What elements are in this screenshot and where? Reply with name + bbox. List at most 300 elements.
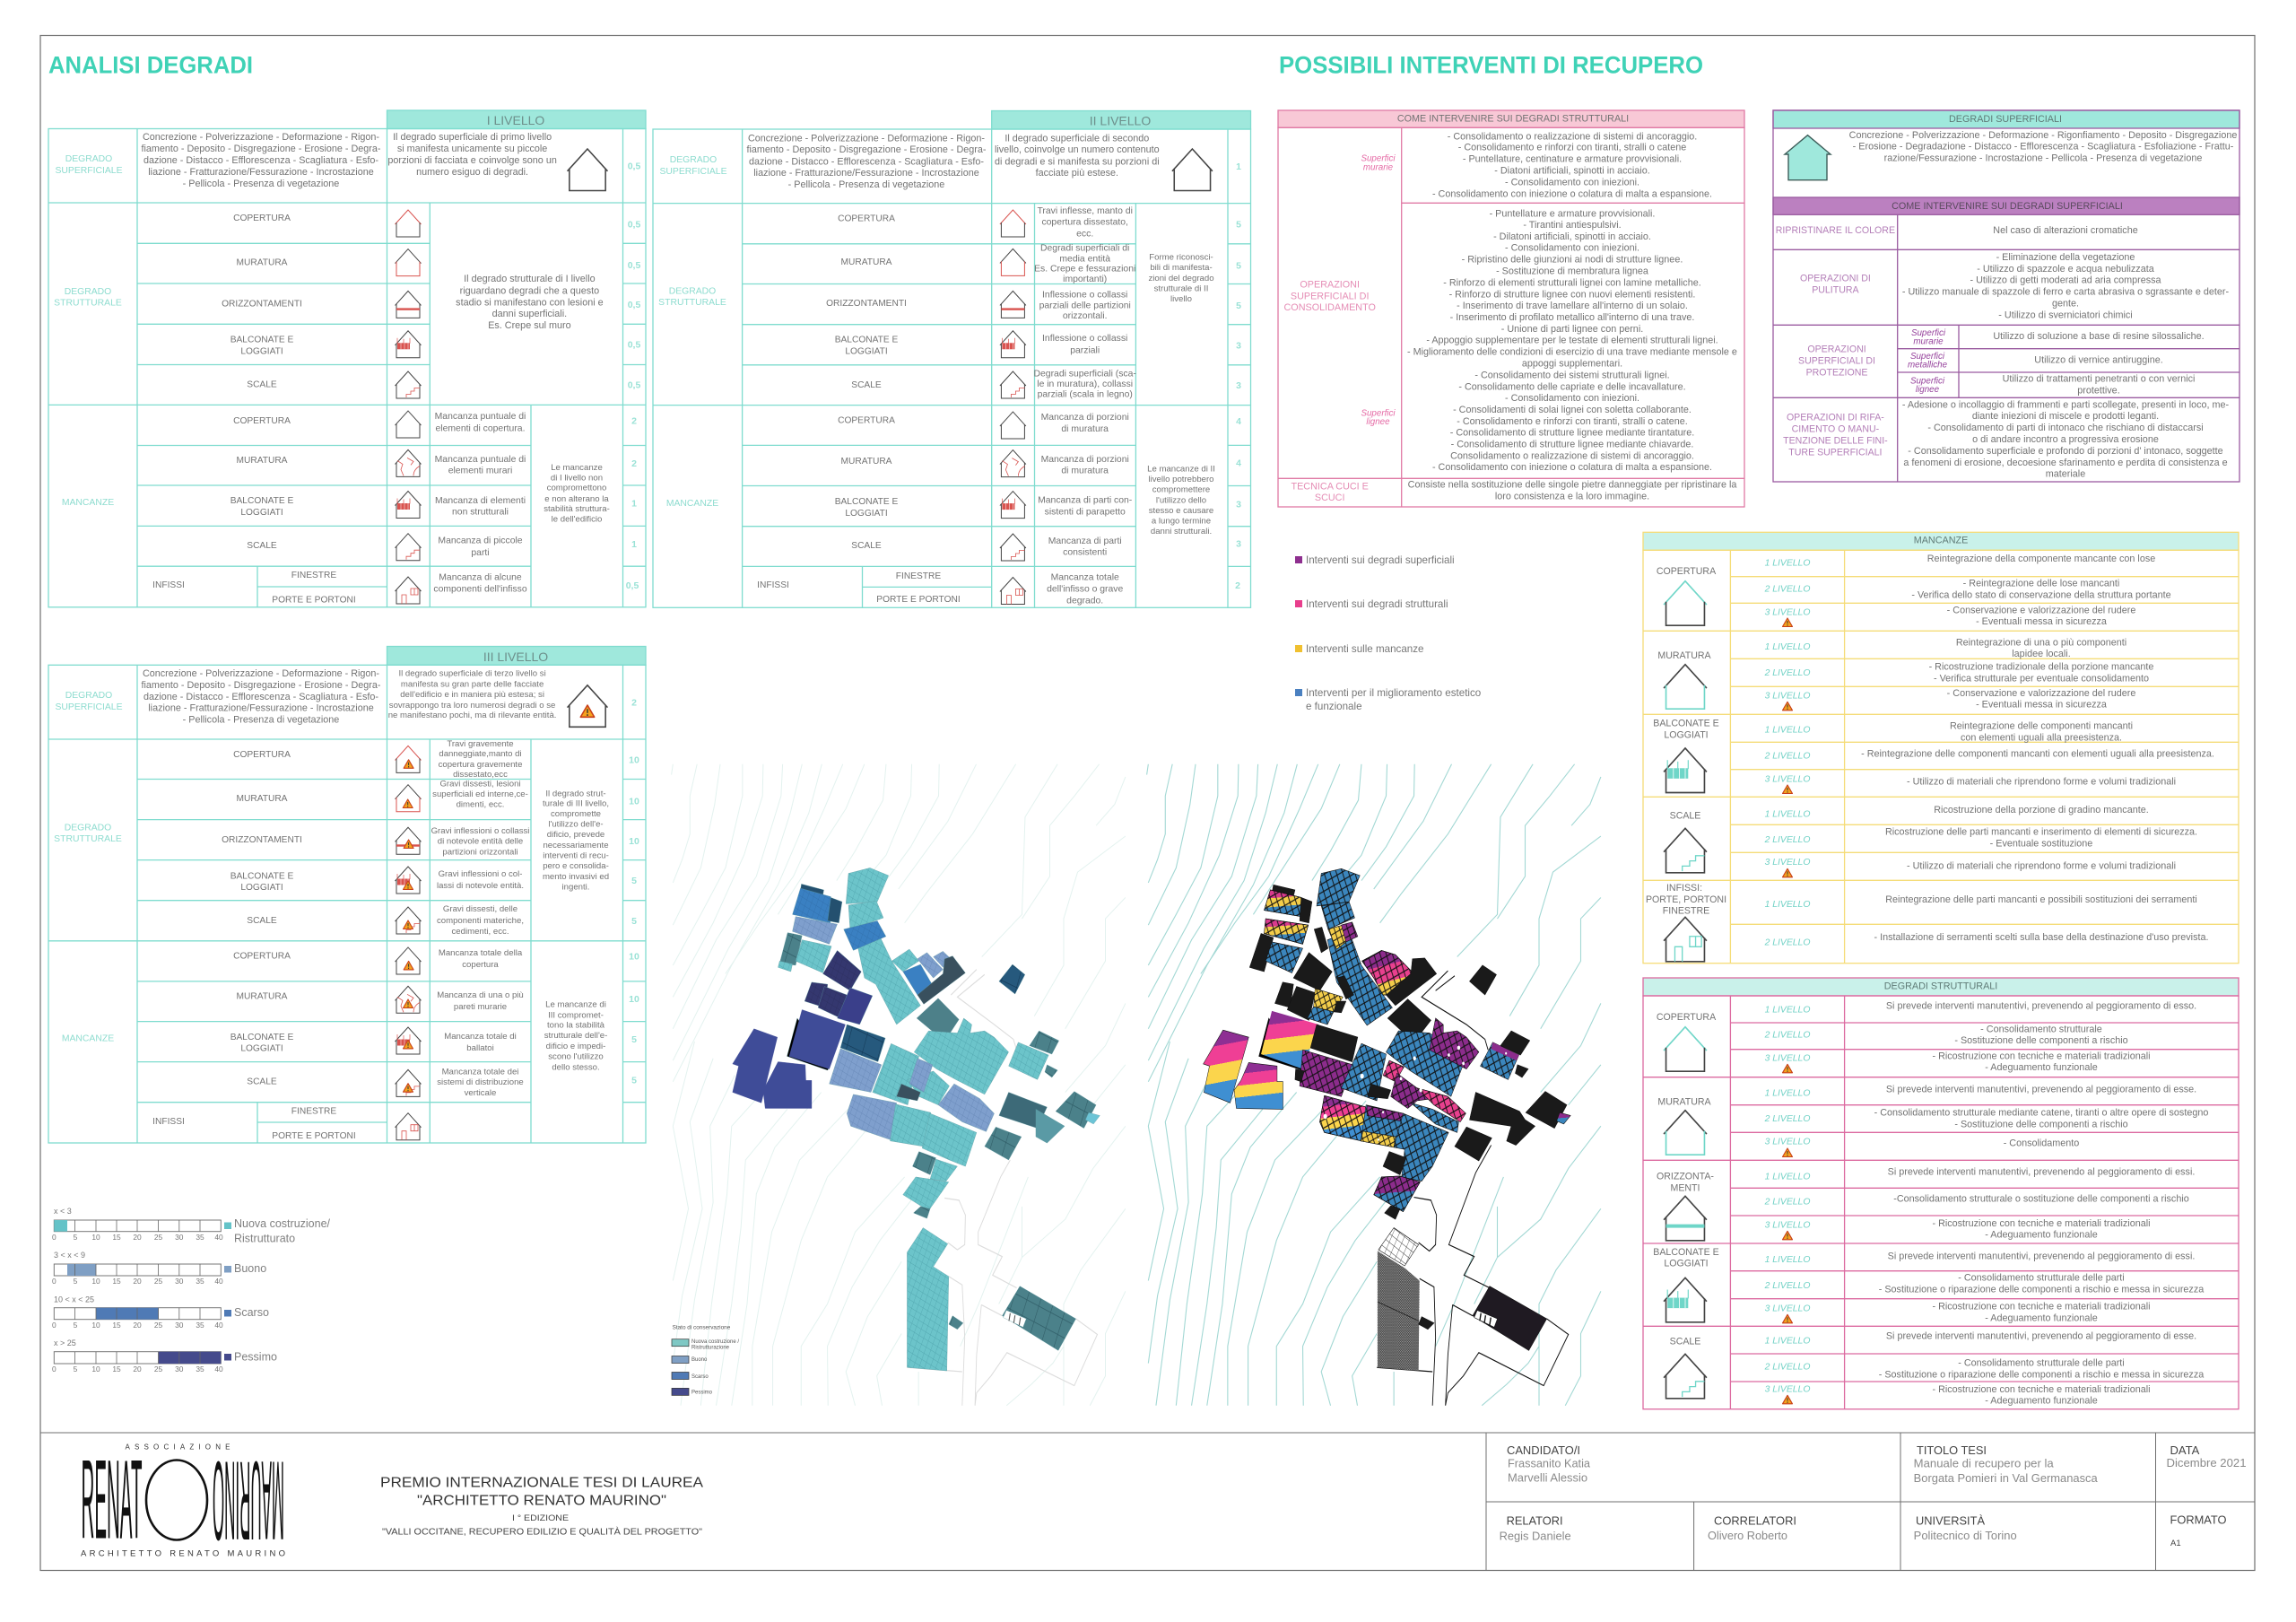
- scores: punteggi: 0,5: [628, 161, 640, 172]
- cartiglio: formato: [2170, 1513, 2226, 1548]
- row labels: OPERAZIONI DI RIFA-: [1787, 413, 1884, 423]
- component names: ORIZZONTA-: [1657, 1172, 1714, 1182]
- text: nota strutturale III livello: turale di III livello,: [543, 798, 609, 808]
- scores: punteggi: 3: [1236, 539, 1241, 550]
- title: analisi degradi: ANALISI DEGRADI: [48, 52, 253, 79]
- axis numbers: 0: [52, 1321, 57, 1330]
- text: superfici lignee: - Consolidamento delle capriate e delle incavallature.: [1458, 381, 1686, 392]
- range labels: 3 < x < 9: [54, 1251, 85, 1260]
- level labels: 3 LIVELLO: [1765, 691, 1810, 701]
- row names: PORTE E PORTONI: [272, 1130, 356, 1140]
- text: interventi mancanze: con elementi uguali alla preesistenza.: [1961, 733, 2122, 744]
- row names: BALCONATE E: [835, 497, 898, 506]
- level labels: 2 LIVELLO: [1764, 834, 1810, 845]
- text: descrizioni operazioni: a fenomeni di erosione, decoesione sfarinamento e perdita di consistenza e: [1903, 458, 2228, 468]
- row labels: SUPERFICIALI DI: [1798, 356, 1875, 367]
- text: descrizione degrado superficiale III livello: ne manifestano pochi, ma di rilevante entità.: [388, 711, 556, 720]
- row labels: OPERAZIONI: [1807, 344, 1866, 355]
- text: superfici lignee: - Unione di parti lignee con perni.: [1501, 324, 1643, 335]
- sublabel: superfici murarie: murarie: [1363, 162, 1394, 172]
- text: descrizione degrado superficiale I livello: si manifesta unicamente su piccole: [397, 144, 547, 154]
- heading: COME INTERVENIRE SUI DEGRADI STRUTTURALI: [1397, 113, 1629, 124]
- component names: LOGGIATI: [1664, 1259, 1709, 1269]
- level labels: 1 LIVELLO: [1765, 1336, 1810, 1346]
- text: interventi mancanze: - Ricostruzione tradizionale della porzione mancante: [1929, 662, 2153, 673]
- text: titolo premio: "VALLI OCCITANE, RECUPERO EDILIZIO E QUALITÀ DEL PROGETTO": [382, 1525, 702, 1538]
- text: superfici murarie: - Consolidamento e rinforzi con tiranti, stralli o catene: [1458, 143, 1686, 153]
- row label: degrado strutturale: STRUTTURALE: [54, 834, 122, 843]
- text: elenco degradi superficiali: liazione - Fratturazione/Fessurazione - Incrostazione: [148, 703, 374, 714]
- level labels: 1 LIVELLO: [1765, 899, 1810, 910]
- row label: degrado superficiale: SUPERFICIALE: [55, 165, 123, 176]
- text: nota mancanze I livello: e non alterano la: [544, 493, 609, 503]
- cartiglio: universita: UNIVERSITÀ: [1916, 1514, 1985, 1527]
- text: descrizione degrado superficiale III livello: dell'edificio e in maniera più estesa; si: [400, 689, 544, 700]
- text: interventi strutturali: Si prevede interventi manutentivi, prevenendo al peggioramento di esse.: [1886, 1330, 2196, 1341]
- row names: MURATURA: [237, 257, 288, 267]
- level labels: 2 LIVELLO: [1764, 1114, 1810, 1123]
- range labels: x > 25: [54, 1339, 76, 1347]
- text: descrizioni II livello: sistenti di parapetto: [1045, 507, 1126, 517]
- text: nota mancanze I livello: di I livello non: [551, 473, 603, 483]
- row names: COPERTURA: [233, 749, 291, 759]
- text: interventi strutturali: - Ricostruzione con tecniche e materiali tradizionali: [1932, 1218, 2151, 1229]
- heading: mancanze: MANCANZE: [1914, 536, 1968, 546]
- sublabels: superfici: metalliche: [1908, 360, 1948, 370]
- text: nota mancanze I livello: Le mancanze: [551, 463, 603, 472]
- text: superfici lignee: - Miglioramento delle condizioni di esercizio di una trave mediante mensole e: [1407, 347, 1737, 358]
- level labels: 1 LIVELLO: [1765, 1088, 1810, 1098]
- scores: punteggi: 5: [631, 916, 637, 927]
- text: superfici lignee: Consolidamento o realizzazione di sistemi di ancoraggio.: [1450, 450, 1694, 461]
- text: nota mancanze III livello: dello stesso.: [552, 1062, 600, 1072]
- text: descrizioni operazioni: - Eliminazione della vegetazione: [1996, 252, 2135, 263]
- row label: degrado strutturale: DEGRADO: [669, 286, 716, 296]
- text: descrizioni operazioni: gente.: [2052, 299, 2079, 310]
- text: descrizioni mancanze I livello: parti: [471, 547, 490, 558]
- text: degrado strutturale I livello: Il degrado strutturale di I livello: [464, 274, 596, 284]
- legend: stato di conservazione: [672, 1324, 739, 1396]
- text: nota strutturale III livello: Il degrado strut-: [545, 789, 606, 798]
- row label: mancanze: MANCANZE: [62, 1033, 114, 1044]
- level labels: 3 LIVELLO: [1765, 774, 1810, 784]
- text: interventi strutturali: Si prevede interventi manutentivi, prevenendo al peggioramento di essi.: [1888, 1251, 2195, 1261]
- text: superfici lignee: - Rinforzo di strutture lignee con nuovi elementi resistenti.: [1449, 289, 1695, 300]
- heading: II livello: II LIVELLO: [1090, 113, 1151, 127]
- sublabel: superfici murarie: Superfici: [1361, 153, 1396, 163]
- cartiglio: correlatori: Olivero Roberto: [1708, 1530, 1787, 1542]
- range labels: x < 3: [54, 1207, 72, 1216]
- text: descrizioni II livello: dell'infisso o grave: [1047, 584, 1123, 594]
- row names: BALCONATE E: [230, 871, 293, 881]
- level labels: 2 LIVELLO: [1764, 1281, 1810, 1290]
- text: interventi strutturali: - Adeguamento funzionale: [1985, 1230, 2098, 1241]
- text: descrizioni III livello: superficiali ed interne,ce-: [432, 789, 528, 798]
- level labels: 2 LIVELLO: [1764, 937, 1810, 947]
- text: descrizioni III livello: Gravi inflessioni o col-: [439, 868, 522, 879]
- text: superfici lignee: - Inserimento di profilato metallico all'interno di una trave.: [1450, 312, 1694, 323]
- panel: tabella III livello: [48, 646, 646, 1143]
- text: descrizioni II livello: Mancanza di parti: [1048, 536, 1122, 545]
- text: descrizioni III livello: copertura: [462, 960, 499, 969]
- cartiglio: data: Dicembre 2021: [2167, 1457, 2247, 1469]
- legend labels: Nuova costruzione/: [234, 1217, 331, 1230]
- text: descrizione degrado superficiale II livello: facciate più estese.: [1036, 168, 1118, 179]
- level labels: 1 LIVELLO: [1765, 1172, 1810, 1182]
- text: superfici murarie: - Diatoni artificiali, spinotti in acciaio.: [1494, 165, 1650, 176]
- sublabel: superfici lignee: lignee: [1366, 416, 1390, 427]
- row names: MURATURA: [237, 793, 288, 804]
- component names: INFISSI:: [1666, 883, 1702, 894]
- text: titolo premio: I ° EDIZIONE: [512, 1513, 569, 1522]
- text: cuci e scuci: loro consistenza e la loro immagine.: [1495, 492, 1649, 502]
- text: descrizioni II livello: Travi inflesse, manto di: [1037, 206, 1133, 215]
- text: elenco degradi superficiali: Concrezione - Polverizzazione - Deformazione - Rigon-: [143, 668, 379, 679]
- scores: punteggi: 2: [631, 416, 637, 427]
- text: degrado strutturale I livello: danni superficiali.: [492, 309, 567, 319]
- text: interventi strutturali: Si prevede interventi manutentivi, prevenendo al peggioramento di essi.: [1888, 1167, 2195, 1178]
- level labels: 3 LIVELLO: [1765, 1053, 1810, 1063]
- cartiglio: data: [2167, 1443, 2247, 1469]
- scores: punteggi: 1: [631, 539, 637, 550]
- icon: casa: [1172, 149, 1213, 190]
- legend labels: Ristrutturato: [234, 1233, 295, 1245]
- text: descrizioni operazioni: o di andare incontro a progressiva erosione: [1972, 434, 2159, 445]
- axis numbers: 15: [112, 1277, 121, 1286]
- text: titolo premio: "ARCHITETTO RENATO MAURINO": [417, 1493, 666, 1509]
- component names: MENTI: [1671, 1182, 1700, 1193]
- text: descrizioni II livello: parziali delle partizioni: [1039, 301, 1131, 310]
- row names: SCALE: [247, 1077, 277, 1086]
- label: tecnica cuci e scuci: SCUCI: [1315, 493, 1344, 503]
- component names: FINESTRE: [1663, 906, 1709, 917]
- text: descrizione degrado superficiale III livello: sovrappongo tra loro numerosi degradi o se: [389, 700, 555, 711]
- text: superfici murarie: - Consolidamento o realizzazione di sistemi di ancoraggio.: [1448, 131, 1697, 142]
- axis numbers: 30: [175, 1321, 184, 1330]
- row names: MURATURA: [841, 456, 892, 466]
- text: nota mancanze I livello: compromettono: [547, 483, 606, 493]
- text: elenco degradi superficiali: fiamento - Deposito - Disgregazione - Erosione - Degra-: [141, 144, 381, 154]
- text: superfici lignee: - Dilatoni artificiali, spinotti in acciaio.: [1493, 231, 1651, 242]
- row names: COPERTURA: [233, 951, 291, 961]
- level labels: 1 LIVELLO: [1765, 1254, 1810, 1265]
- text: descrizioni mancanze I livello: non strutturali: [452, 507, 509, 517]
- text: degrado strutturale I livello: stadio si manifestano con lesioni e: [456, 297, 604, 308]
- text: nota mancanze III livello: scono l'utilizzo: [548, 1051, 604, 1061]
- level labels: 2 LIVELLO: [1764, 1362, 1810, 1372]
- legend: tipi di intervento: Interventi sui degradi strutturali: [1306, 597, 1448, 610]
- text: superfici lignee: - Consolidamento e rinforzi con tiranti, stralli o catene.: [1457, 416, 1688, 427]
- map: interventi di recupero: [1147, 764, 1601, 1406]
- icons: componenti: [1664, 1027, 1707, 1399]
- text: descrizioni operazioni: - Utilizzo di spazzole e acqua nebulizzata: [1977, 264, 2154, 275]
- range labels: 10 < x < 25: [54, 1295, 94, 1304]
- text: superfici lignee: - Sostituzione di membratura lignea: [1496, 266, 1648, 276]
- text: interventi mancanze: - Reintegrazione delle lose mancanti: [1963, 578, 2119, 589]
- text: interventi mancanze: Reintegrazione delle componenti mancanti: [1950, 721, 2133, 732]
- scores: punteggi: 0,5: [628, 220, 640, 231]
- row names: ORIZZONTAMENTI: [826, 298, 907, 309]
- text: descrizioni operazioni: - Utilizzo di sverniciatori chimici: [1998, 310, 2133, 320]
- text: nota strutturale II livello: Forme riconosci-: [1149, 252, 1213, 262]
- icons: allerta: [1783, 1064, 1792, 1404]
- text: descrizioni II livello: importanti): [1063, 275, 1107, 283]
- text: descrizioni II livello: Inflessione o collassi: [1042, 334, 1127, 343]
- row names: MURATURA: [841, 257, 892, 267]
- text: superfici lignee: - Consolidamento con iniezione o colatura di malta a espansione.: [1432, 462, 1712, 473]
- text: descrizioni operazioni: Utilizzo di soluzione a base di resine silossaliche.: [1993, 331, 2205, 342]
- text: nota strutturale III livello: dificio, prevede: [547, 829, 604, 840]
- text: degrado strutturale I livello: riguardano degradi che a questo: [460, 285, 599, 296]
- text: elenco degradi superficiali: liazione - Fratturazione/Fessurazione - Incrostazione: [148, 167, 374, 178]
- component names: BALCONATE E: [1653, 1247, 1719, 1258]
- row label: degrado superficiale: DEGRADO: [65, 691, 112, 700]
- cartiglio: correlatori: [1708, 1514, 1796, 1542]
- text: descrizioni operazioni: - Consolidamento di parti di intonaco che rischiano di distaccarsi: [1927, 423, 2204, 433]
- text: nota mancanze I livello: le dell'edificio: [552, 514, 602, 524]
- row names: SCALE: [247, 915, 277, 926]
- row label: degrado superficiale: DEGRADO: [670, 154, 717, 165]
- text: descrizioni II livello: Degradi superficiali (sca-: [1034, 369, 1136, 379]
- text: interventi strutturali: - Consolidamento strutturale: [1980, 1024, 2102, 1034]
- panel: tabella II livello: [653, 111, 1250, 607]
- scores: punteggi: 0,5: [626, 580, 639, 591]
- legend: barre stato di conservazione: [52, 1207, 331, 1373]
- scores: punteggi: 3: [1236, 500, 1241, 510]
- text: superfici murarie: - Consolidamento con iniezione o colatura di malta a espansione.: [1432, 188, 1712, 199]
- scores: punteggi: 10: [629, 754, 639, 765]
- icons: componenti con allerta: [395, 746, 422, 1140]
- component names: MURATURA: [1657, 1096, 1712, 1107]
- row names: SCALE: [851, 540, 882, 551]
- text: descrizioni mancanze I livello: elementi murari: [448, 466, 512, 475]
- text: descrizioni mancanze I livello: Mancanza puntuale di: [435, 454, 526, 464]
- text: descrizioni II livello: Mancanza totale: [1051, 572, 1119, 582]
- text: descrizioni II livello: orizzontali.: [1063, 310, 1108, 321]
- text: superfici lignee: - Appoggio supplementare per le testate di elementi strutturali lignei.: [1426, 336, 1718, 346]
- level labels: 2 LIVELLO: [1764, 751, 1810, 761]
- scores: punteggi: 4: [1236, 458, 1241, 469]
- row names: SCALE: [247, 540, 277, 551]
- text: descrizioni II livello: consistenti: [1063, 547, 1107, 557]
- text: descrizioni II livello: di muratura: [1061, 466, 1109, 475]
- text: interventi strutturali: - Ricostruzione con tecniche e materiali tradizionali: [1932, 1302, 2151, 1312]
- text: elenco degradi superficiali: fiamento - Deposito - Disgregazione - Erosione - Degra-: [141, 680, 381, 691]
- cartiglio: titolo tesi: [1914, 1443, 2098, 1485]
- text: elenco degradi superficiali: - Pellicola - Presenza di vegetazione: [183, 715, 339, 726]
- row names: LOGGIATI: [240, 508, 283, 517]
- text: superfici lignee: - Ripristino delle giunzioni ai nodi di strutture lignee.: [1462, 255, 1683, 266]
- text: descrizioni III livello: partizioni orizzontali: [442, 847, 518, 857]
- text: interventi strutturali: - Adeguamento funzionale: [1985, 1312, 2098, 1323]
- text: descrizioni III livello: sistemi di distribuzione: [437, 1077, 524, 1087]
- label: operazioni superficiali di consolidamento: CONSOLIDAMENTO: [1284, 302, 1376, 313]
- text: descrizioni II livello: di muratura: [1061, 423, 1109, 434]
- text: descrizioni mancanze I livello: componenti dell'infisso: [433, 584, 527, 594]
- text: elenco degradi: Concrezione - Polverizzazione - Deformazione - Rigonfiamento - Deposito - Disgregazione: [1849, 130, 2237, 141]
- cartiglio: candidati: CANDIDATO/I: [1507, 1443, 1580, 1457]
- text: descrizioni II livello: Inflessione o collassi: [1042, 290, 1127, 300]
- text: nota mancanze III livello: III compromet-: [548, 1010, 604, 1020]
- text: nota strutturale III livello: pero e consolida-: [543, 861, 609, 870]
- icons: componenti: [1664, 581, 1707, 962]
- scores: punteggi: 0,5: [628, 300, 640, 310]
- axis numbers: 5: [74, 1277, 78, 1286]
- row labels: RIPRISTINARE IL COLORE: [1776, 225, 1895, 236]
- text: nota strutturale II livello: bili di manifesta-: [1150, 262, 1213, 273]
- row names: ORIZZONTAMENTI: [222, 834, 302, 845]
- cartiglio: formato: FORMATO: [2170, 1513, 2226, 1527]
- row names: COPERTURA: [233, 214, 291, 222]
- text: superfici lignee: - Consolidamento di strutture lignee mediante chiavarde.: [1451, 440, 1693, 450]
- axis numbers: 10: [91, 1321, 100, 1330]
- text: descrizioni mancanze I livello: Mancanza di piccole: [438, 536, 523, 545]
- text: descrizioni III livello: Mancanza totale dei: [442, 1067, 518, 1077]
- heading: III livello: III LIVELLO: [483, 650, 548, 664]
- axis numbers: 20: [133, 1365, 142, 1373]
- scores: punteggi: 1: [631, 499, 637, 510]
- level labels: 3 LIVELLO: [1765, 1384, 1810, 1394]
- text: descrizioni II livello: Degradi superficiali di: [1040, 243, 1129, 253]
- text: descrizioni mancanze I livello: Mancanza di alcune: [439, 572, 522, 582]
- text: descrizioni III livello: dimenti, ecc.: [457, 799, 504, 809]
- row names: ORIZZONTAMENTI: [222, 299, 302, 309]
- row names: INFISSI: [152, 580, 185, 590]
- axis numbers: 35: [196, 1365, 204, 1373]
- axis numbers: 25: [154, 1277, 162, 1286]
- scores: punteggi: 3: [1236, 340, 1241, 351]
- text: interventi mancanze: - Eventuali messa in sicurezza: [1976, 700, 2107, 711]
- text: elenco degradi superficiali: dazione - Distacco - Efflorescenza - Scagliatura - Esfo-: [749, 156, 984, 167]
- text: descrizioni II livello: parziali: [1070, 345, 1100, 355]
- text: descrizioni III livello: Gravi dissesti, lesioni: [439, 779, 521, 789]
- level labels: 3 LIVELLO: [1765, 1220, 1810, 1230]
- text: interventi strutturali: - Adeguamento funzionale: [1985, 1062, 2098, 1073]
- scores: punteggi: 10: [629, 952, 639, 963]
- text: elenco degradi superficiali: Concrezione - Polverizzazione - Deformazione - Rigon-: [748, 133, 985, 144]
- level labels: 2 LIVELLO: [1764, 1197, 1810, 1207]
- text: descrizione degrado superficiale I livello: numero esiguo di degradi.: [416, 167, 528, 178]
- text: descrizioni operazioni: - Utilizzo manuale di spazzole di ferro e carta abrasiva o sgrassante e deter-: [1902, 287, 2230, 298]
- cartiglio: titolo tesi: Manuale di recupero per la: [1914, 1458, 2054, 1470]
- heading: degradi superficiali: DEGRADI SUPERFICIALI: [1949, 114, 2062, 125]
- text: elenco degradi superficiali: dazione - Distacco - Efflorescenza - Scagliatura - Esfo-: [144, 155, 378, 166]
- icon: casa con allerta: [568, 685, 607, 727]
- text: interventi mancanze: Reintegrazione delle parti mancanti e possibili sostituzioni dei serramenti: [1885, 894, 2197, 905]
- text: interventi mancanze: - Installazione di serramenti scelti sulla base della destinazione d'uso prevista.: [1874, 932, 2208, 943]
- sublabels: superfici: Superfici: [1910, 376, 1945, 386]
- row names: FINESTRE: [896, 571, 941, 581]
- level labels: 1 LIVELLO: [1765, 1005, 1810, 1015]
- text: descrizioni operazioni: - Adesione o incollaggio di frammenti e parti scollegate, presenti in loco, me-: [1902, 399, 2230, 410]
- text: interventi strutturali: Si prevede interventi manutentivi, prevenendo al peggioramento di esso.: [1886, 1000, 2196, 1011]
- text: interventi strutturali: - Sostituzione delle componenti a rischio: [1954, 1035, 2128, 1046]
- row labels: TENZIONE DELLE FINI-: [1783, 435, 1888, 446]
- cartiglio: data: DATA: [2170, 1443, 2200, 1457]
- row names: PORTE E PORTONI: [272, 595, 356, 605]
- cartiglio: correlatori: CORRELATORI: [1714, 1514, 1796, 1527]
- legend: tipi di intervento: Interventi sui degradi superficiali: [1306, 554, 1455, 565]
- component names: COPERTURA: [1657, 566, 1717, 577]
- row names: COPERTURA: [838, 415, 895, 425]
- row names: SCALE: [851, 380, 882, 389]
- row names: PORTE E PORTONI: [876, 594, 961, 605]
- logo: associazione renato maurino: ARCHITETTO RENATO MAURINO: [81, 1548, 285, 1559]
- row names: LOGGIATI: [240, 346, 283, 356]
- panel: degradi superficiali: [1773, 110, 2239, 482]
- text: elenco degradi superficiali: - Pellicola - Presenza di vegetazione: [788, 179, 944, 190]
- component names: MURATURA: [1657, 650, 1712, 661]
- level labels: 3 LIVELLO: [1765, 858, 1810, 867]
- text: superfici lignee: - Inserimento di trave lamellare all'interno di un solaio.: [1457, 301, 1688, 311]
- row names: LOGGIATI: [845, 508, 888, 519]
- text: cuci e scuci: Consiste nella sostituzione delle singole pietre danneggiate per ripristinare la: [1408, 480, 1736, 491]
- text: degrado strutturale I livello: Es. Crepe sul muro: [488, 320, 571, 331]
- row names: BALCONATE E: [230, 335, 293, 344]
- text: nota mancanze II livello: Le mancanze di II: [1147, 464, 1215, 474]
- text: interventi strutturali: - Consolidamento: [2004, 1138, 2079, 1149]
- text: interventi strutturali: - Sostituzione o riparazione delle componenti a rischio e messa in sicurezza: [1879, 1284, 2204, 1295]
- scores: punteggi: 2: [1235, 580, 1240, 591]
- text: nota mancanze I livello: stabilità struttura-: [544, 504, 610, 513]
- text: nota strutturale III livello: compromette: [551, 809, 601, 818]
- row names: LOGGIATI: [845, 346, 888, 356]
- text: interventi mancanze: - Utilizzo di materiali che riprendono forme e volumi tradizionali: [1907, 860, 2176, 871]
- text: descrizione degrado superficiale III livello: manifesta su gran parte delle facciate: [401, 679, 544, 689]
- level labels: 1 LIVELLO: [1765, 642, 1810, 651]
- text: interventi strutturali: - Ricostruzione con tecniche e materiali tradizionali: [1932, 1384, 2151, 1395]
- scores: punteggi: 2: [631, 697, 637, 708]
- cartiglio: candidati: Marvelli Alessio: [1508, 1472, 1587, 1485]
- scores: punteggi: 5: [1236, 261, 1241, 272]
- sublabels: superfici: murarie: [1913, 336, 1944, 346]
- text: nota strutturale III livello: mento invasivi ed: [543, 871, 609, 881]
- axis numbers: 5: [74, 1365, 78, 1373]
- text: descrizioni mancanze I livello: Mancanza di elementi: [435, 495, 526, 505]
- text: descrizioni operazioni: Utilizzo di trattamenti penetranti o con vernici: [2003, 373, 2195, 384]
- legend: tipi di intervento: Interventi sulle mancanze: [1306, 642, 1423, 655]
- text: interventi strutturali: - Consolidamento strutturale mediante catene, tiranti o altre opere di sostegno: [1874, 1108, 2208, 1119]
- text: interventi mancanze: - Verifica strutturale per eventuale consolidamento: [1934, 674, 2149, 685]
- level labels: 1 LIVELLO: [1765, 558, 1810, 568]
- label: tecnica cuci e scuci: TECNICA CUCI E: [1292, 481, 1369, 492]
- text: nota strutturale III livello: necessariamente: [543, 840, 609, 850]
- text: descrizioni II livello: parziali (scala in legno): [1038, 389, 1133, 399]
- text: nota mancanze II livello: compromettere: [1152, 484, 1210, 494]
- text: descrizioni operazioni: protettive.: [2077, 385, 2120, 396]
- scores: punteggi: 1: [1236, 161, 1241, 172]
- level labels: 3 LIVELLO: [1765, 607, 1810, 617]
- text: interventi strutturali: - Sostituzione o riparazione delle componenti a rischio e messa in sicurezza: [1879, 1369, 2204, 1380]
- axis numbers: 5: [74, 1321, 78, 1330]
- icons: componenti: [395, 210, 422, 604]
- row names: SCALE: [247, 379, 277, 389]
- text: nota strutturale III livello: l'utilizzo dell'e-: [548, 819, 604, 829]
- axis numbers: 5: [74, 1233, 78, 1242]
- row labels: PULITURA: [1812, 284, 1860, 295]
- scores: punteggi: 0,5: [628, 380, 640, 391]
- legend: tipi di intervento: Interventi per il miglioramento estetico: [1306, 687, 1481, 698]
- text: descrizioni III livello: danneggiate,manto di: [439, 748, 522, 759]
- icons: allerta: [1783, 618, 1792, 877]
- scores: punteggi: 5: [631, 876, 637, 886]
- text: descrizioni III livello: di notevole entità delle: [438, 836, 523, 846]
- text: nota mancanze III livello: dificio e impedi-: [546, 1041, 605, 1051]
- text: descrizione degrado superficiale I livello: porzioni di facciata e coinvolge sono un: [387, 155, 557, 166]
- text: nota strutturale II livello: livello: [1170, 294, 1192, 303]
- text: descrizione degrado superficiale III livello: Il degrado superficiale di terzo livello si: [398, 668, 546, 678]
- text: nota mancanze III livello: tono la stabilità: [547, 1020, 605, 1030]
